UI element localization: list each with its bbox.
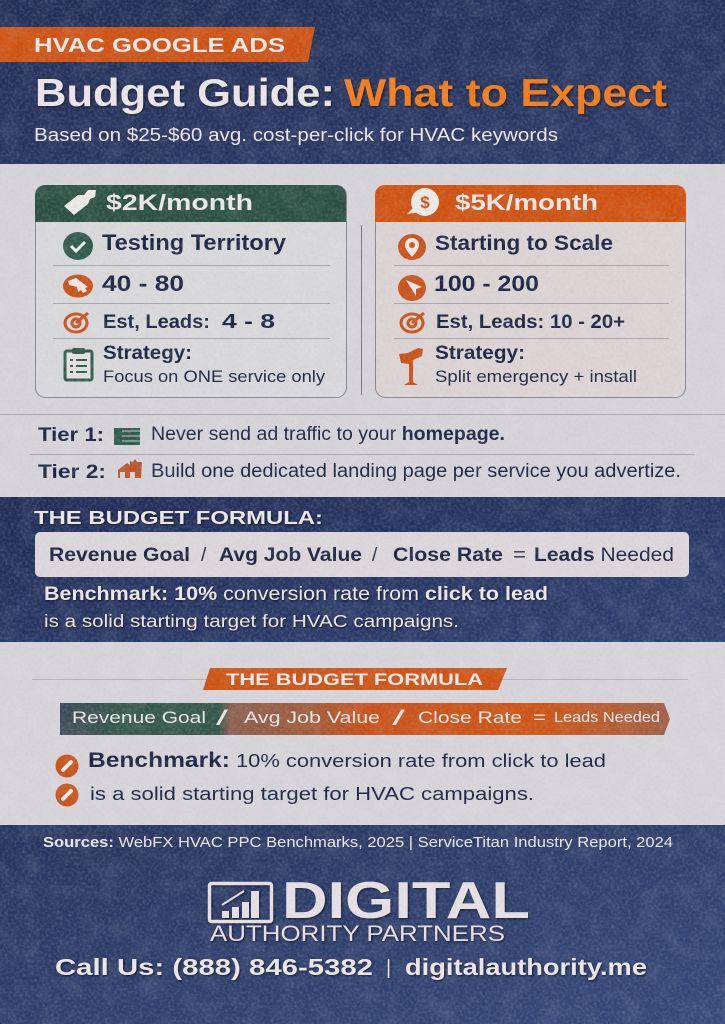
subtitle: Based on $25-$60 avg. cost-per-click for HVAC keywords	[34, 124, 558, 145]
formula arrow bar: /	[392, 707, 405, 730]
bullet: starting target	[56, 783, 534, 806]
row: strategy: Split emergency + install	[435, 367, 637, 386]
row: clicks: 100 - 200	[434, 271, 539, 296]
row: estimated leads: Est, Leads: 10 - 20+	[436, 312, 625, 333]
row: estimated leads	[65, 311, 275, 333]
bullet: benchmark: 10% conversion rate from click to lead	[236, 750, 606, 771]
row: strategy: Strategy:	[435, 343, 525, 364]
bullet: benchmark: Benchmark:	[88, 749, 230, 772]
formula box	[35, 532, 689, 577]
formula heading: THE BUDGET FORMULA:	[34, 508, 323, 528]
row: clicks	[398, 271, 539, 301]
formula arrow bar: /	[216, 707, 228, 730]
formula arrow bar: Avg Job Value	[244, 708, 380, 727]
card header: $5K: $	[420, 193, 430, 212]
row: estimated leads: 4 - 8	[222, 311, 275, 333]
formula box: /	[201, 545, 207, 566]
card header: $5K	[375, 185, 686, 222]
formula arrow bar: Close Rate	[418, 708, 522, 727]
background: light cards band	[0, 164, 725, 497]
row: testing territory	[63, 230, 287, 260]
logo: digital authority partners	[210, 872, 530, 946]
formula box: Close Rate	[393, 545, 503, 566]
tier 2 tip: Build one dedicated landing page per service you advertize.	[151, 461, 681, 482]
contact line: digitalauthority.me	[405, 954, 647, 980]
contact line: Call Us: (888) 846-5382	[55, 954, 373, 980]
title: What to Expect	[344, 72, 667, 115]
tier 2 tip	[38, 459, 681, 483]
tier 1 tip: Never send ad traffic to your homepage.	[151, 424, 505, 445]
background: navy formula band	[0, 497, 725, 642]
section banner	[203, 668, 507, 690]
row: strategy: Focus on ONE service only	[103, 367, 326, 386]
contact line: |	[386, 957, 391, 979]
card header: $5K: $5K/month	[455, 190, 598, 215]
title: Budget Guide:	[35, 72, 335, 115]
row: starting to scale: Starting to Scale	[435, 232, 613, 255]
header banner: HVAC GOOGLE ADS	[34, 35, 285, 57]
formula box: Revenue Goal	[49, 545, 190, 566]
bullet: starting target: is a solid starting target for HVAC campaigns.	[90, 783, 534, 804]
row: strategy: Strategy:	[103, 343, 192, 364]
row: testing territory: Testing Territory	[102, 230, 287, 255]
panel: $5K per month	[375, 185, 686, 398]
formula arrow bar: =	[533, 708, 546, 727]
formula arrow bar	[60, 703, 670, 735]
icon: chart box	[210, 884, 272, 922]
row: starting to scale	[398, 232, 613, 260]
card header: $2K: $2K/month	[106, 190, 253, 215]
tier 1 tip: Tier 1:	[38, 425, 104, 446]
background: light formula band	[0, 642, 725, 825]
section banner: THE BUDGET FORMULA	[226, 670, 483, 689]
bullet: benchmark	[56, 749, 606, 778]
benchmark text: Benchmark: 10% conversion rate from click to lead	[44, 584, 548, 605]
formula box: Leads Needed	[534, 545, 674, 566]
contact line	[55, 954, 647, 980]
row: clicks: 40 - 80	[102, 271, 184, 296]
card header: $2K	[35, 185, 346, 222]
logo: digital authority partners: AUTHORITY PARTNERS	[210, 921, 505, 946]
tier 2 tip: Tier 2:	[38, 462, 106, 483]
formula arrow bar: Leads Needed	[554, 709, 660, 726]
row: clicks	[63, 271, 184, 298]
row: strategy	[65, 343, 326, 386]
formula box: /	[372, 545, 378, 566]
logo: digital authority partners: DIGITAL	[282, 872, 530, 930]
row: estimated leads: Est, Leads:	[103, 312, 210, 333]
icon: house	[114, 459, 142, 478]
background: navy footer band	[0, 825, 725, 1024]
icon: list	[114, 428, 140, 445]
benchmark text	[44, 584, 548, 631]
benchmark text: is a solid starting target for HVAC campaigns.	[44, 611, 459, 631]
row: strategy	[399, 343, 637, 386]
formula box: =	[513, 545, 526, 566]
formula box: Avg Job Value	[219, 545, 362, 566]
panel: $2K per month	[35, 185, 346, 398]
background: navy top band	[0, 0, 725, 164]
title	[35, 72, 667, 115]
formula arrow bar: Revenue Goal	[72, 708, 206, 727]
header banner	[0, 27, 315, 62]
sources: Sources: WebFX HVAC PPC Benchmarks, 2025 | ServiceTitan Industry Report, 2024	[43, 834, 673, 851]
